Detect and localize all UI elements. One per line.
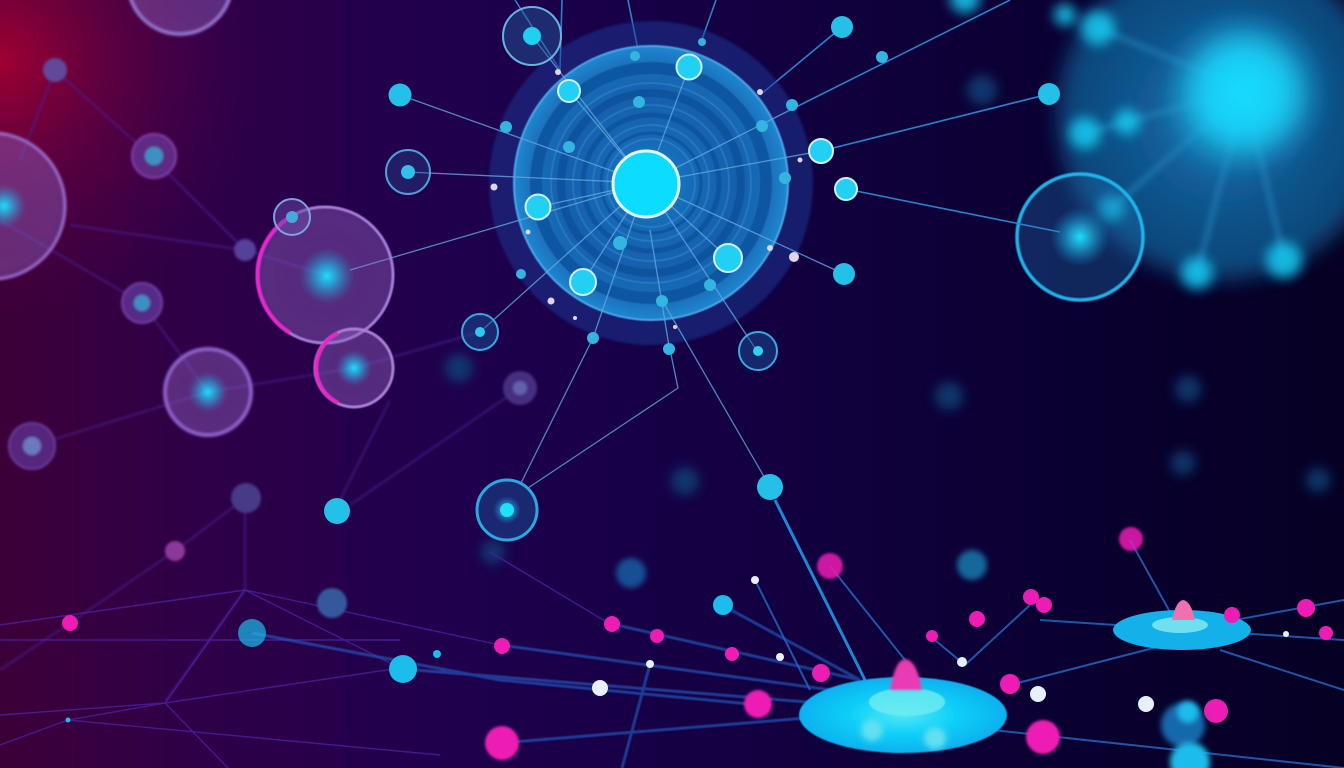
big blurred sphere, top right: [445, 0, 1344, 564]
ring node: top partial: [128, 0, 232, 34]
ground disc: main: [799, 659, 1007, 753]
top-right connectors: [515, 0, 1060, 232]
ring node: large pink: [257, 207, 393, 343]
ring nodes around hub: [386, 7, 777, 540]
hub halo: [489, 21, 813, 345]
ground disc: right: [1113, 600, 1251, 650]
left purple ring nodes: [0, 0, 537, 561]
tiny hub nodes: [500, 38, 888, 355]
blue ground nodes: [66, 550, 1210, 768]
blurred background network, left: [0, 70, 520, 702]
ring node: far-left: [0, 133, 65, 279]
ground network lines: [0, 552, 620, 768]
central white-ringed node: [613, 151, 679, 217]
magenta ground nodes: [62, 527, 1333, 760]
large ring node, right: [1017, 174, 1143, 300]
solid cyan nodes: [526, 54, 857, 295]
central hub: [514, 46, 788, 320]
white ground sparks: [592, 576, 1289, 712]
connector to ground disc: [775, 500, 865, 680]
small purple nodes: [9, 58, 537, 561]
hub spokes: [350, 36, 844, 488]
ring node: pink mid: [315, 329, 393, 407]
ring node: blurred: [165, 349, 251, 435]
